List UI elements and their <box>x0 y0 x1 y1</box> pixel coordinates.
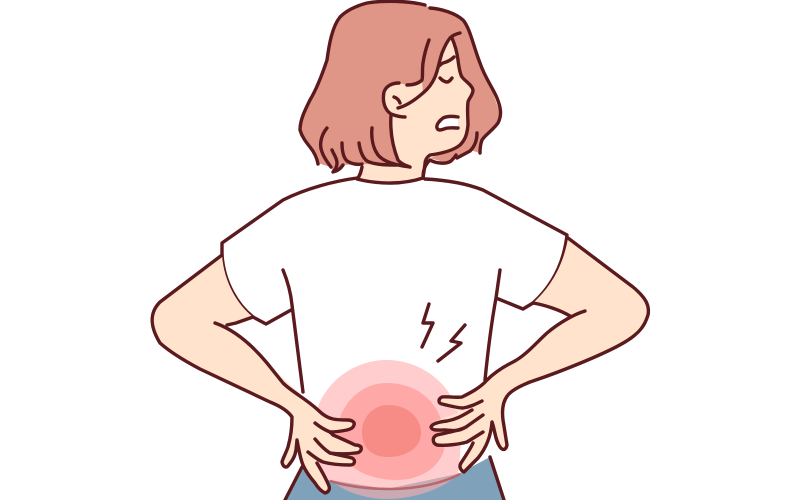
pain area: concentric circles <box>313 360 461 499</box>
ear <box>383 83 405 117</box>
t-shirt <box>222 178 567 480</box>
closed eye <box>439 57 454 82</box>
right arm and hand <box>431 238 648 472</box>
left arm and hand <box>152 255 361 493</box>
neck <box>357 150 429 183</box>
icon: pain lightning bolts <box>422 304 465 361</box>
fringe <box>407 40 429 85</box>
pain circle: middle <box>337 383 445 480</box>
waistband shadow <box>330 474 460 489</box>
pain circle: outer <box>313 360 461 489</box>
pain circle: below waistband <box>330 474 458 499</box>
mouth <box>437 117 458 130</box>
pain circle: inner <box>362 405 421 457</box>
jeans <box>284 457 505 500</box>
head: face <box>383 33 473 178</box>
head: hair <box>300 1 501 172</box>
face outline <box>423 38 473 178</box>
